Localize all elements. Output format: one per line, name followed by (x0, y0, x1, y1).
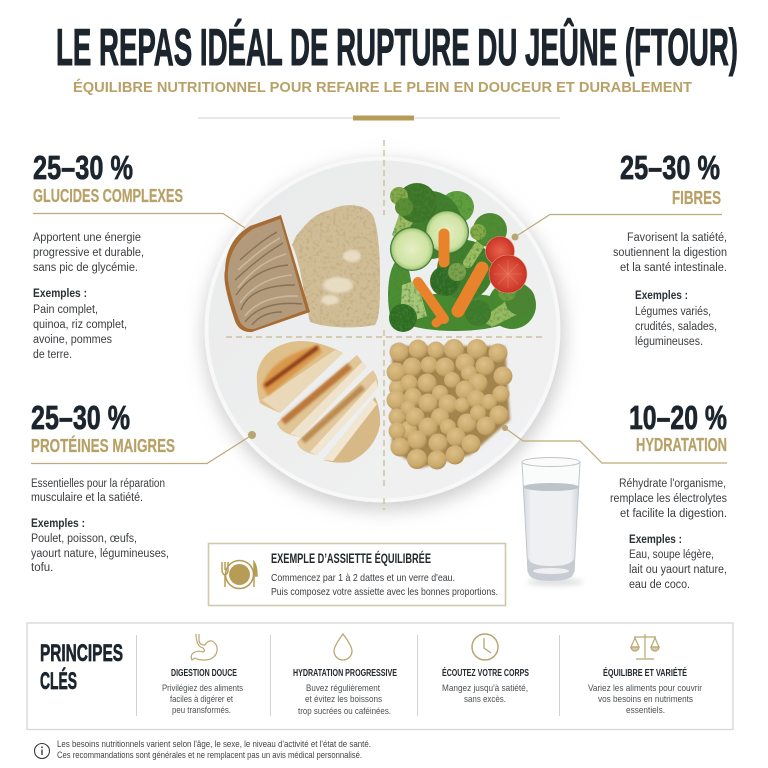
disclaimer text: Les besoins nutritionnels varient selon l'âge, le sexe, le niveau d'activité et l'état de santé. (57, 739, 371, 749)
text: faciles à digérer et (170, 694, 233, 705)
examples: Légumes variés, (635, 306, 711, 318)
callout text: Puis composez votre assiette avec les bonnes proportions. (271, 586, 498, 598)
callout text: Commencez par 1 à 2 dattes et un verre d'eau. (271, 572, 455, 584)
glass of water (522, 458, 583, 586)
category heading: FIBRES (672, 188, 721, 208)
heading: ÉCOUTEZ VOTRE CORPS (442, 666, 529, 679)
text (442, 683, 528, 705)
principle: hydratation progressive (293, 634, 397, 717)
vegetables (388, 183, 536, 332)
chicken slices (257, 341, 380, 463)
header divider (198, 116, 560, 120)
description: progressive et durable, (33, 247, 144, 259)
carrots (418, 234, 482, 323)
description: Réhydrate l'organisme, (619, 478, 726, 490)
text: vos besoins en nutriments (598, 694, 693, 705)
heading: ÉQUILIBRE ET VARIÉTÉ (603, 666, 687, 679)
description (33, 232, 144, 274)
description: sans pic de glycémie. (33, 262, 138, 274)
examples: eau de coco. (629, 579, 690, 591)
chickpeas (386, 339, 512, 470)
slice 2 (277, 355, 366, 437)
examples: Eau, soupe légère, (629, 549, 714, 561)
icon: plate and cutlery (222, 560, 257, 588)
connector line (31, 431, 256, 464)
text: Variez les aliments pour couvrir (588, 683, 702, 694)
text: Buvez régulièrement (306, 683, 380, 694)
footnote (34, 739, 371, 760)
description (613, 232, 727, 274)
section heading: PRINCIPES (40, 640, 123, 667)
category heading: PROTÉINES MAIGRES (31, 435, 175, 456)
category heading: GLUCIDES COMPLEXES (33, 186, 183, 206)
icon: clock (472, 634, 498, 660)
icon: balance scales (631, 634, 659, 659)
description (31, 478, 165, 504)
examples (33, 288, 127, 361)
text: et évitez les boissons (305, 694, 382, 705)
examples: Exemples : (33, 288, 87, 300)
broccoli (389, 183, 535, 332)
text: trop sucrées ou caféinées. (298, 706, 391, 717)
description: Apportent une énergie (33, 232, 141, 244)
leaves (388, 191, 536, 331)
examples: légumineuses. (635, 336, 703, 348)
description: Essentielles pour la réparation (31, 478, 165, 490)
text: peu transformés. (172, 705, 231, 716)
examples: crudités, salades, (635, 321, 717, 333)
heading: HYDRATATION PROGRESSIVE (293, 668, 397, 679)
slice 3 (297, 370, 378, 455)
icon: water drop (334, 634, 352, 660)
dashed quadrant guides (226, 140, 546, 510)
plate with food (204, 140, 564, 510)
tomatoes (486, 236, 527, 293)
callout: exemple d'assiette équilibrée (208, 544, 506, 606)
slice 1 (257, 341, 343, 413)
description: et facilite la digestion. (620, 508, 727, 520)
examples: quinoa, riz complet, (33, 319, 127, 331)
panel: glucides complexes (33, 149, 245, 361)
examples: Pain complet, (33, 304, 98, 316)
quinoa (292, 205, 380, 327)
callout title: EXEMPLE D’ASSIETTE ÉQUILIBRÉE (271, 551, 431, 566)
text: essentiels. (626, 705, 665, 716)
description (610, 478, 727, 520)
text (162, 683, 243, 716)
connector line (502, 425, 727, 463)
principle: équilibre et variété (588, 634, 702, 716)
principle: digestion douce (162, 634, 243, 716)
examples (629, 534, 727, 591)
examples: Exemples : (629, 534, 682, 546)
description: musculaire et la satiété. (31, 492, 143, 504)
examples: tofu. (31, 562, 53, 574)
examples (31, 518, 169, 574)
percentage: 25–30 % (33, 149, 133, 186)
text: Mangez jusqu'à satiété, (442, 683, 528, 694)
icon: info (34, 744, 50, 758)
panel: principes clés (27, 623, 733, 730)
plate shadow (204, 162, 564, 510)
text: Privilégiez des aliments (162, 683, 243, 694)
examples: lait ou yaourt nature, (629, 564, 727, 576)
plate (204, 156, 560, 502)
examples: Poulet, poisson, œufs, (31, 533, 137, 545)
section heading: CLÉS (40, 667, 77, 695)
panel: protéines maigres (31, 399, 256, 574)
disclaimer text: Ces recommandations sont générales et ne remplacent pas un avis médical personnalisé. (57, 750, 362, 760)
section heading (40, 640, 123, 695)
disclaimer text (57, 739, 371, 760)
description: remplace les électrolytes (610, 493, 727, 505)
panel: fibres (512, 149, 727, 348)
percentage: 10–20 % (629, 399, 727, 436)
examples (635, 290, 717, 348)
principle: écoutez votre corps (442, 634, 529, 705)
examples: yaourt nature, légumineuses, (31, 548, 169, 560)
examples: avoine, pommes (33, 334, 112, 346)
description: Favorisent la satiété, (627, 232, 727, 244)
text: sans excès. (464, 694, 506, 705)
connector line (33, 214, 245, 228)
text (298, 683, 391, 717)
cucumber slices (390, 210, 469, 271)
percentage: 25–30 % (620, 149, 720, 186)
subtitle: ÉQUILIBRE NUTRITIONNEL POUR REFAIRE LE PLEIN EN DOUCEUR ET DURABLEMENT (73, 79, 692, 96)
category heading: HYDRATATION (636, 435, 727, 455)
heading: DIGESTION DOUCE (171, 668, 237, 679)
connector line (512, 214, 722, 240)
bread slice (224, 215, 310, 332)
callout text (271, 572, 498, 598)
column dividers (136, 635, 560, 716)
icon: stomach (191, 634, 217, 660)
text (588, 683, 702, 716)
panel: hydratation (502, 399, 727, 591)
description: soutiennent la digestion (613, 247, 727, 259)
percentage: 25–30 % (31, 399, 130, 436)
slice 4 (323, 397, 380, 463)
examples: de terre. (33, 349, 72, 361)
examples: Exemples : (635, 290, 688, 302)
examples: Exemples : (31, 518, 85, 530)
description: et la santé intestinale. (620, 262, 727, 274)
